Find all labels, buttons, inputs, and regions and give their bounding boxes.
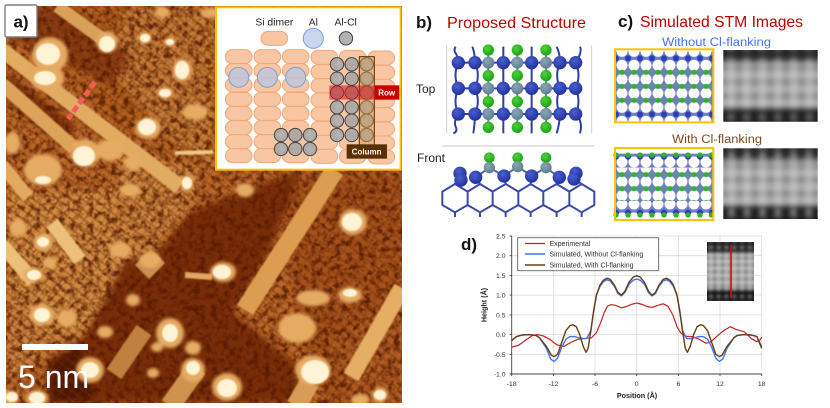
legend labels: Si dimer	[255, 18, 294, 29]
scale bar	[22, 344, 88, 350]
panel label a	[5, 5, 37, 37]
simulated with flanking curve	[512, 276, 762, 357]
legend labels	[255, 18, 357, 29]
y tick labels: -1.0	[494, 372, 506, 378]
x tick labels: 0	[635, 381, 639, 388]
legend: Experimental	[550, 241, 591, 248]
heading c: Simulated STM Images	[640, 14, 803, 31]
legend labels: Al	[309, 18, 318, 29]
panel c: simulated STM images	[613, 12, 824, 226]
panel label c: c)	[618, 12, 633, 31]
axes	[510, 236, 762, 376]
y tick labels	[494, 234, 506, 378]
x tick labels: 12	[716, 381, 724, 388]
model with flanking	[613, 148, 714, 220]
silicon dimers	[225, 31, 395, 164]
x tick labels: -6	[592, 381, 598, 388]
y tick labels: 2.5	[496, 234, 506, 240]
top label: Top	[416, 82, 436, 96]
x tick labels: -12	[548, 381, 559, 388]
panel d: height profile chart	[461, 234, 766, 400]
x tick labels: 6	[677, 381, 681, 388]
scale label: 5 nm	[18, 359, 89, 395]
Al-Cl atoms	[274, 32, 373, 156]
inset: atomic model legend and grid	[216, 7, 401, 170]
y tick labels: 2.0	[496, 253, 506, 260]
row highlight: Row	[378, 88, 396, 97]
front label: Front	[417, 151, 446, 165]
curves	[512, 276, 762, 361]
x axis title: Position (Å)	[617, 391, 658, 400]
inset STM image with profile line	[704, 239, 757, 304]
simulated without flanking curve	[512, 279, 762, 361]
panel a: STM topography image	[0, 0, 410, 408]
x tick labels: 18	[758, 381, 766, 388]
y tick labels: -0.5	[494, 352, 506, 359]
view divider	[442, 145, 594, 147]
subheading with flanking: With Cl-flanking	[672, 134, 762, 146]
column label: Column	[352, 148, 382, 157]
legend labels: Al-Cl	[334, 18, 357, 29]
column highlight	[359, 57, 374, 145]
panel label d: d)	[461, 235, 477, 254]
heading b: Proposed Structure	[447, 15, 586, 32]
y axis title: Height (Å)	[480, 287, 488, 322]
grid	[512, 236, 762, 374]
legend	[518, 238, 659, 271]
panel label b: b)	[416, 13, 432, 32]
model without flanking	[615, 49, 713, 122]
dashed red marker line	[68, 82, 95, 119]
panel b: proposed structure	[416, 13, 594, 217]
y tick labels: 1.5	[496, 273, 506, 280]
y tick labels: 0.0	[496, 332, 506, 339]
aluminium atoms	[229, 28, 323, 87]
panel label a: a)	[13, 12, 29, 32]
column label	[347, 144, 387, 159]
experimental curve	[512, 303, 762, 347]
STM image without flanking	[723, 50, 818, 122]
x tick labels	[507, 381, 766, 388]
front view model	[442, 152, 594, 217]
x tick labels: -18	[507, 381, 517, 388]
top view model	[447, 44, 592, 133]
legend: Simulated, With Cl-flanking	[550, 262, 634, 269]
subheading without flanking: Without Cl-flanking	[662, 37, 771, 49]
legend: Simulated, Without Cl-flanking	[550, 252, 643, 258]
row highlight	[329, 85, 399, 100]
y tick labels: 0.5	[496, 312, 506, 319]
y tick labels: 1.0	[496, 293, 506, 300]
STM image with flanking	[723, 148, 818, 219]
